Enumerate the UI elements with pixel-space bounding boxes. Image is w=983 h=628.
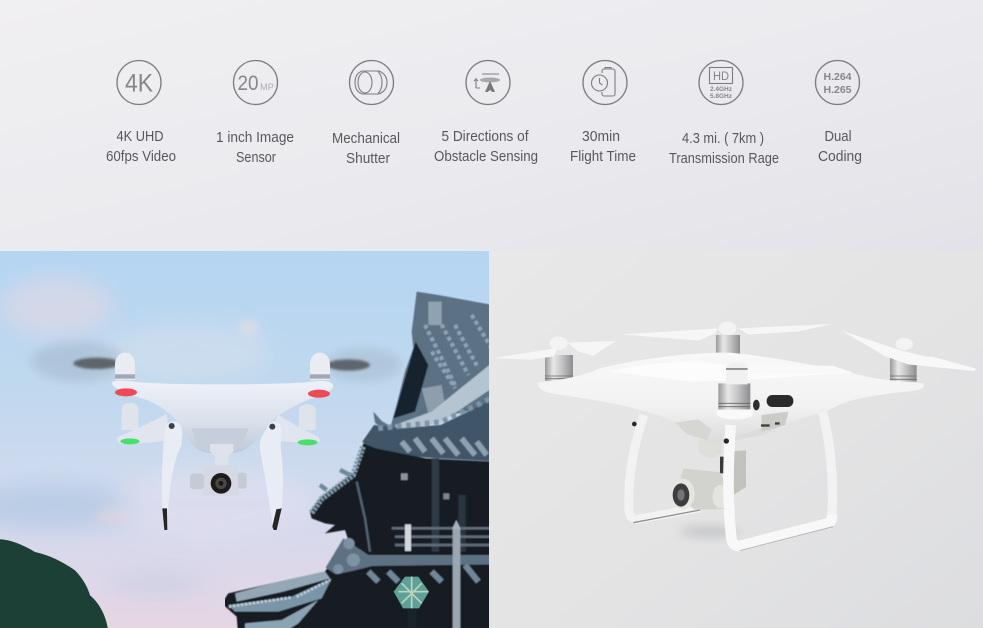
panel: drone in flight over temple [0, 250, 502, 628]
clouds [0, 277, 313, 597]
label: 30min Flight Time: Flight Time [570, 149, 636, 165]
label: 30min Flight Time: 30min [582, 129, 620, 145]
icon: HD frequency: 5.8GHz [710, 93, 733, 100]
icon: 20MP: MP [260, 82, 274, 92]
feature: mechanical shutter [332, 60, 400, 167]
propellers [622, 324, 832, 341]
icon: 20MP: 20 [238, 72, 258, 95]
label: Dual Coding [818, 129, 862, 165]
icon: HD frequency: 2.4GHz [710, 86, 733, 93]
icon: H.264 H.265 [816, 60, 860, 104]
feature: obstacle sensing [434, 60, 538, 165]
feature banner background [0, 0, 983, 251]
rear motors and arms [122, 403, 316, 430]
label: Dual Coding: Coding [818, 149, 862, 165]
right motor blade [898, 357, 976, 371]
feature: transmission range [669, 60, 779, 167]
body [538, 353, 924, 441]
label: 1 inch Image Sensor [216, 130, 294, 166]
icon: obstacle directions [466, 60, 510, 104]
front right propeller [747, 363, 853, 375]
icon: 4K: 4K [125, 70, 153, 98]
icon: clock and battery [583, 60, 627, 104]
icon: shutter lens [350, 60, 394, 104]
temple [225, 291, 489, 628]
label: 30min Flight Time [570, 129, 636, 165]
studio backdrop [489, 251, 983, 628]
lantern [394, 577, 429, 628]
beam and lower roof [326, 538, 502, 574]
label: 4.3 mi. ( 7km ) Transmission Rage: Transmission Rage [669, 151, 779, 167]
icon: HD frequency: HD [713, 71, 729, 83]
front landing gear [728, 425, 832, 546]
upper roof [391, 292, 502, 428]
lower left roofs [235, 572, 330, 602]
label: 5 Directions of Obstacle Sensing: Obstacle Sensing [434, 149, 538, 165]
label: 4K UHD 60fps Video: 4K UHD [116, 129, 164, 145]
body [112, 381, 333, 453]
label: 5 Directions of Obstacle Sensing: 5 Directions of [442, 129, 529, 145]
front motor [718, 383, 750, 409]
left motor [545, 355, 573, 381]
lower roof tiles [362, 395, 502, 462]
camera [675, 468, 730, 510]
pole [453, 528, 460, 628]
feature: image sensor [216, 60, 294, 166]
sky [0, 250, 489, 628]
front motors [115, 352, 330, 380]
label: 1 inch Image Sensor: 1 inch Image [216, 130, 294, 146]
underside details [675, 419, 712, 440]
label: Dual Coding: Dual [824, 129, 852, 145]
label: 1 inch Image Sensor: Sensor [236, 150, 276, 166]
feature: dual coding [816, 60, 862, 165]
panel: studio drone [489, 251, 983, 628]
dark wall and eaves [222, 443, 495, 628]
label: 5 Directions of Obstacle Sensing [434, 129, 538, 165]
icon: H.264 H.265: H.264 [824, 72, 852, 83]
back landing gear [629, 415, 700, 519]
drone in flight: propeller blur [32, 342, 402, 382]
green LEDs [120, 438, 140, 444]
label: 4.3 mi. ( 7km ) Transmission Rage [669, 131, 779, 167]
feature: flight time [570, 60, 636, 165]
label: Mechanical Shutter: Mechanical [332, 131, 400, 147]
red LEDs [115, 388, 137, 396]
gimbal [698, 437, 722, 458]
rear motors [716, 335, 740, 355]
icon: 20MP [234, 60, 278, 104]
icon: HD frequency [699, 60, 743, 104]
icon: H.264 H.265: H.265 [824, 85, 852, 96]
drone in flight [112, 352, 333, 530]
pillars and railing [432, 458, 439, 552]
camera [203, 465, 239, 496]
label: Mechanical Shutter [332, 131, 400, 167]
label: 4K UHD 60fps Video [106, 129, 176, 165]
gimbal [210, 444, 233, 465]
feature: 4K UHD video [106, 60, 176, 165]
label: 4K UHD 60fps Video: 60fps Video [106, 149, 176, 165]
landing gear [162, 421, 182, 530]
tree [0, 539, 108, 628]
drone on white [494, 322, 976, 551]
label: Mechanical Shutter: Shutter [346, 151, 390, 167]
label: 4.3 mi. ( 7km ) Transmission Rage: 4.3 mi. ( 7km ) [682, 131, 764, 147]
ground shadow [680, 526, 740, 538]
